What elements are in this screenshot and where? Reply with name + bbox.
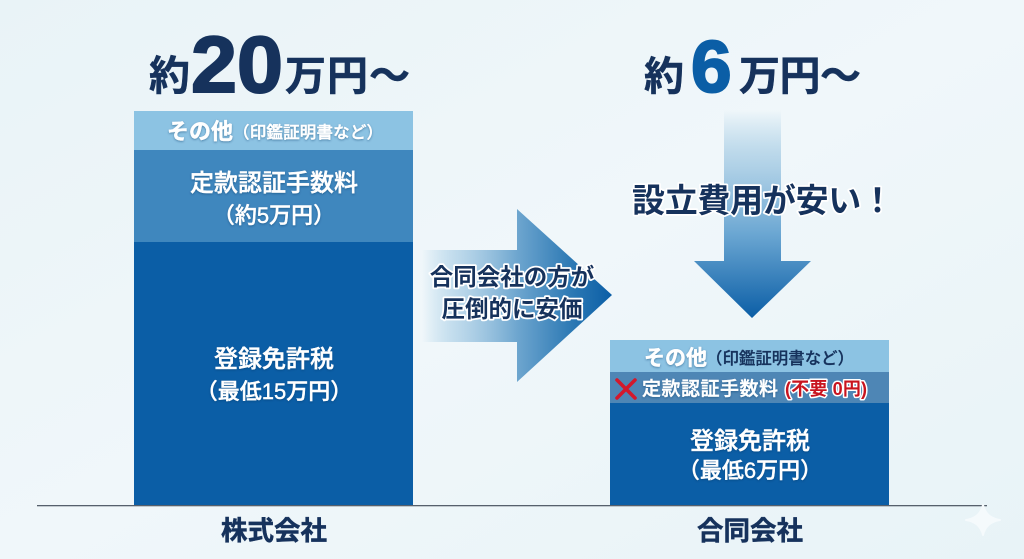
segment: 定款認証手数料 不要: (不要 0円) [785,379,867,399]
icon: red cross [617,380,635,398]
heading: 株式会社 price: 万円〜 [285,53,410,99]
segment: その他: その他 [644,347,707,370]
segment: 登録免許税 [134,242,413,505]
segment: 定款認証手数料: （約5万円） [213,203,335,228]
segment: その他: その他 [167,119,233,144]
segment: 登録免許税: （最低15万円） [196,379,352,404]
label: 合同会社: 合同会社 [697,516,803,546]
segment: 登録免許税 [610,403,889,505]
icon: sparkle watermark [966,505,1000,535]
segment: その他 [610,340,889,372]
stacked bar: 株式会社 [134,111,413,505]
segment: 登録免許税: （最低6万円） [678,458,822,483]
segment: その他 [134,111,413,150]
heading: 合同会社 price: 約 [644,55,684,99]
heading: 株式会社 price: 約 [149,53,190,99]
arrow: 株式会社 to 合同会社: 圧倒的に安価 [442,296,582,322]
heading: 合同会社 price [644,27,861,108]
label: 株式会社: 株式会社 [221,516,327,546]
arrow: 株式会社 to 合同会社 [422,209,612,382]
heading: 合同会社 price: 万円〜 [739,53,861,99]
callout: 設立費用が安い: 設立費用が安い！ [632,182,894,219]
segment: その他: （印鑑証明書など） [233,123,383,142]
segment: 定款認証手数料: 定款認証手数料 [190,170,358,197]
segment: 登録免許税: 登録免許税 [214,346,334,373]
segment: 定款認証手数料 [134,150,413,242]
arrow: down to 合同会社 [632,110,894,318]
heading: 株式会社 price [149,20,410,109]
arrow label: 合同会社の方が [430,263,595,290]
segment: 定款認証手数料 不要: 定款認証手数料 [642,378,778,400]
heading: 株式会社 price: 20 [191,20,283,109]
stacked bar: 合同会社 [610,340,889,505]
segment: 登録免許税: 登録免許税 [690,428,810,455]
segment: 定款認証手数料 不要 [610,372,889,403]
heading: 合同会社 price: 6 [691,27,732,108]
segment: その他: （印鑑証明書など） [706,350,854,368]
